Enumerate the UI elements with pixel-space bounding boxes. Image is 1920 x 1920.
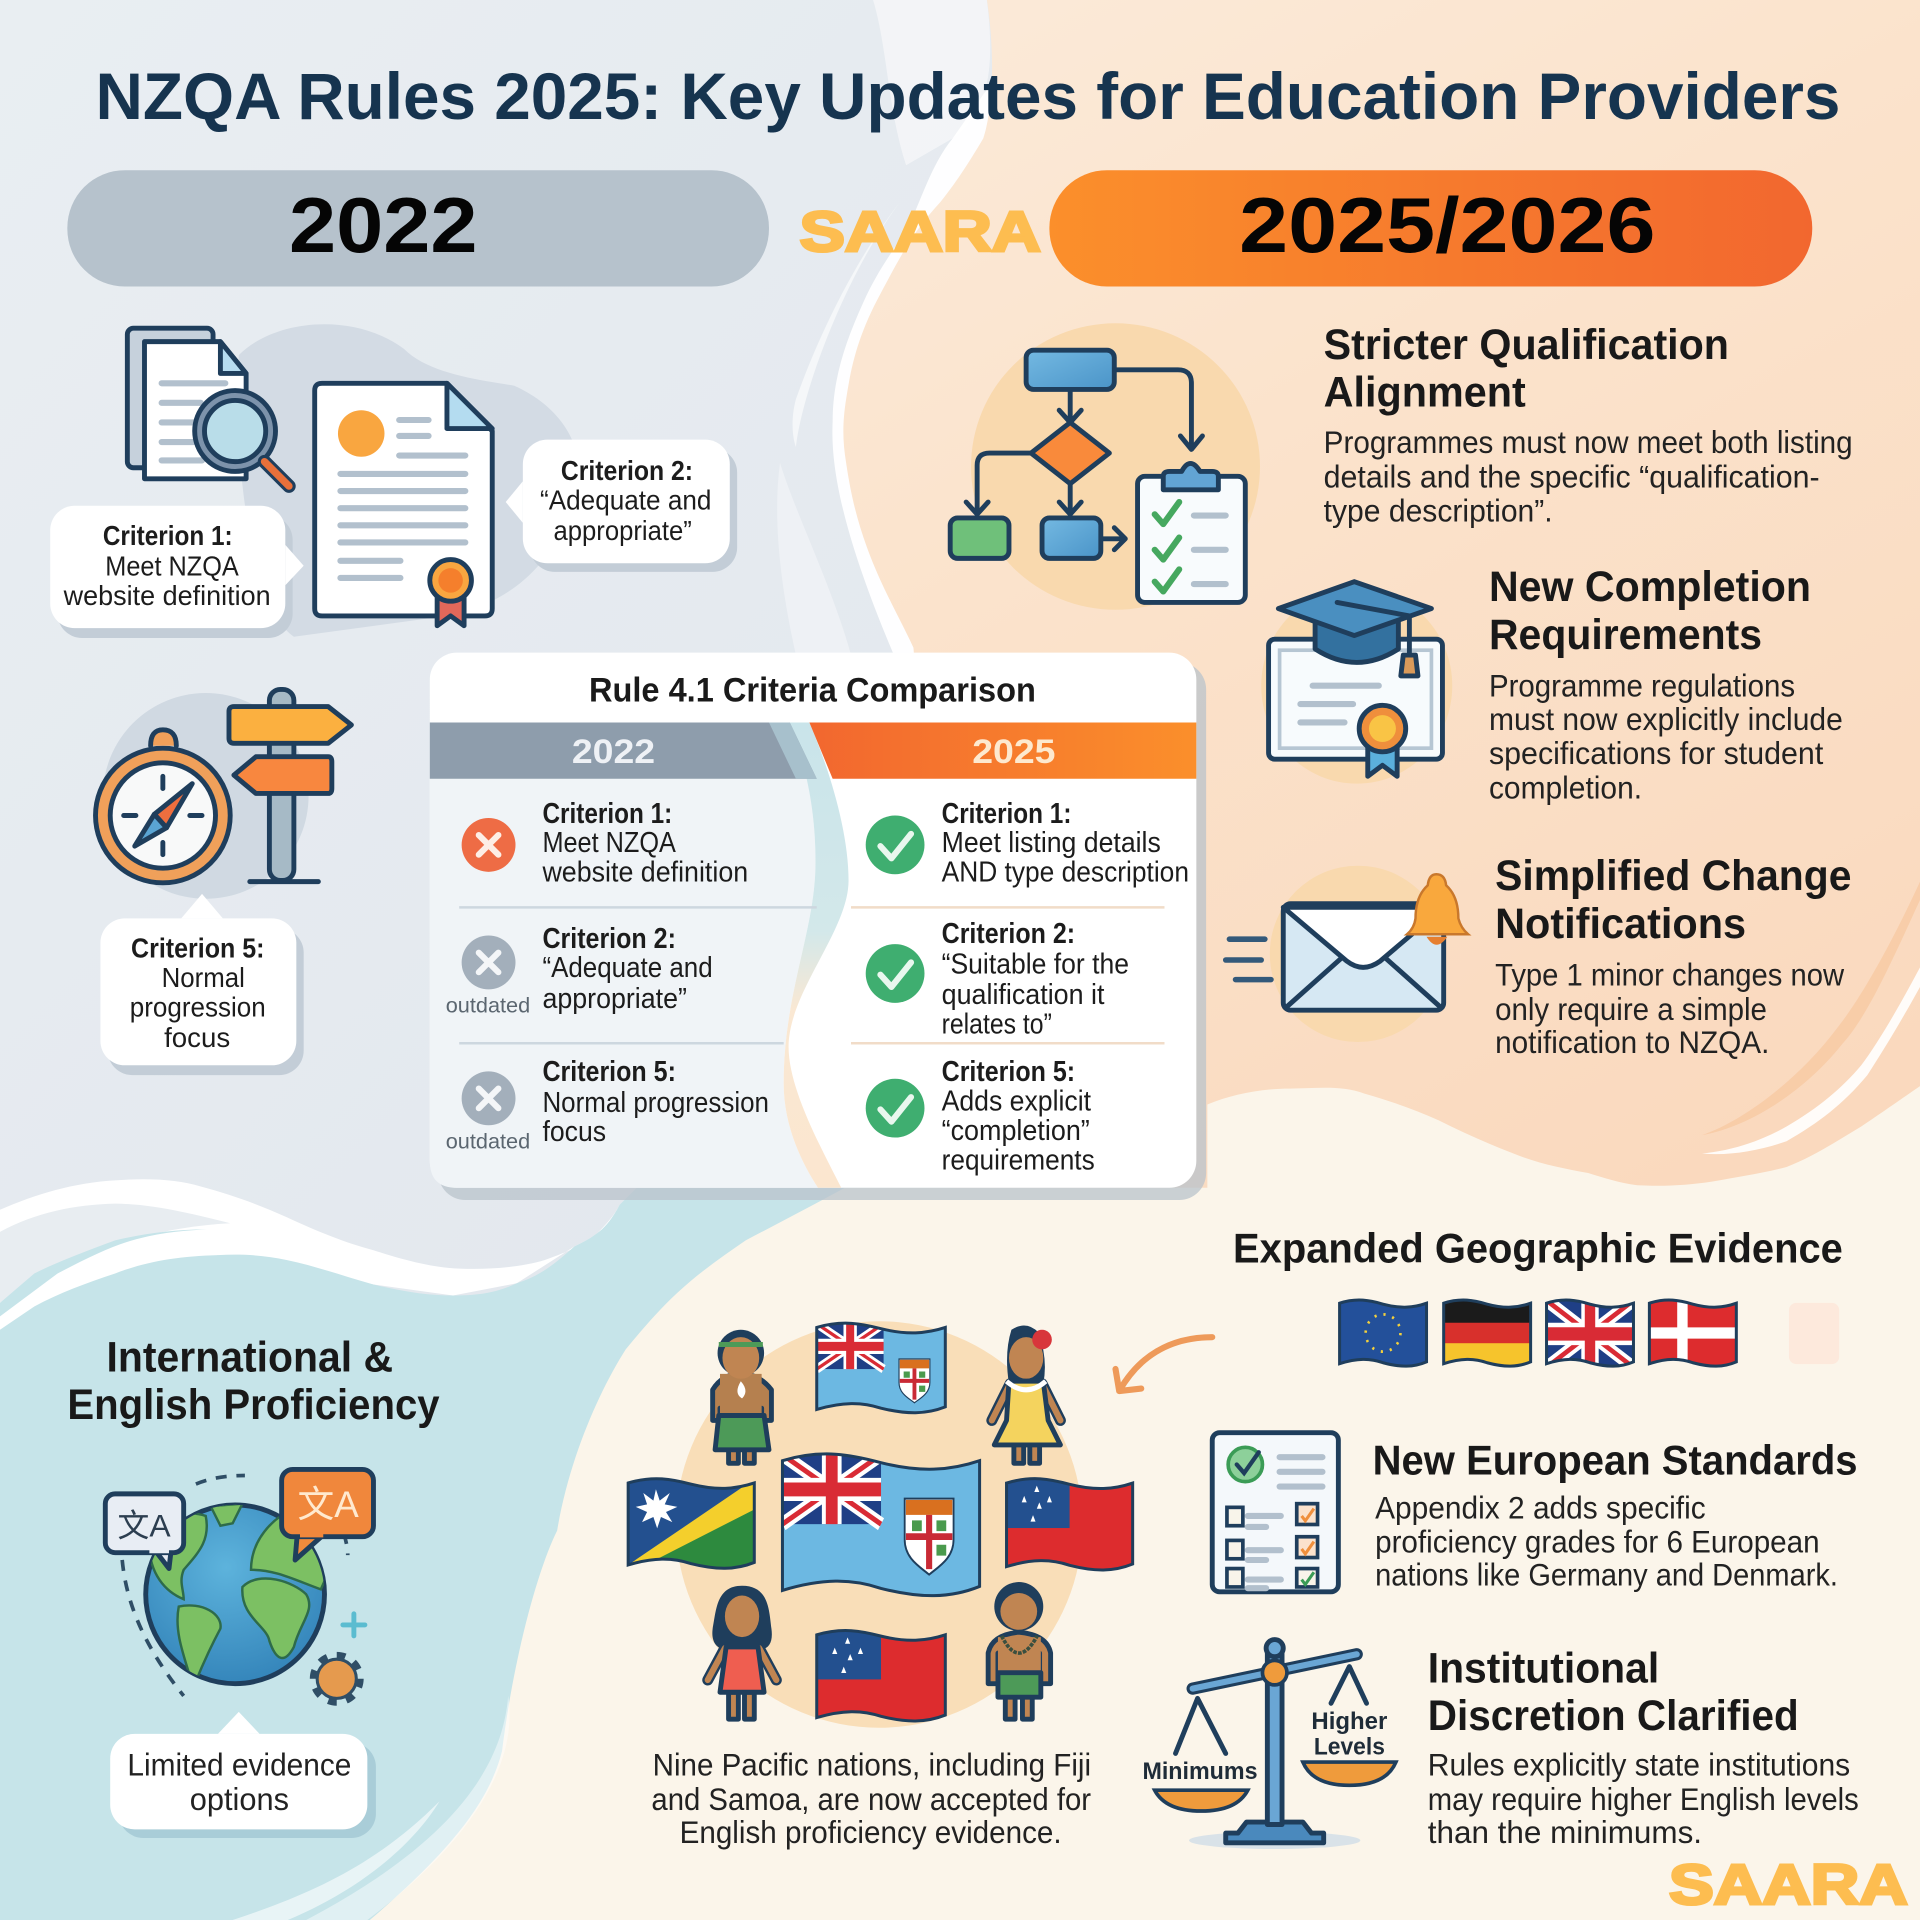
text: simplified change notifications: Simplified Change xyxy=(1495,852,1851,900)
text: Pacific nations xyxy=(651,1747,1091,1850)
callout: criterion 5 xyxy=(100,894,304,1075)
person: woman bottom left xyxy=(708,1586,776,1719)
icon: balance scale xyxy=(1142,1640,1396,1849)
flag: Samoa bottom xyxy=(817,1631,945,1723)
icon: documents and magnifier xyxy=(127,328,289,486)
text: simplified change notifications: Type 1 minor changes now xyxy=(1495,957,1845,993)
text: new European standards: nations like Germany and Denmark. xyxy=(1375,1557,1838,1593)
title: NZQA Rules 2025: Key Updates for Education Providers xyxy=(96,60,1840,134)
callout: criterion 1 xyxy=(50,506,304,638)
icon: balance scale: Minimums xyxy=(1142,1758,1258,1785)
panel: Rule 4.1 criteria comparison xyxy=(430,653,1206,1200)
text: new completion requirements: Programme regulations xyxy=(1489,668,1795,704)
icon: globe with translation bubbles: 文A xyxy=(118,1508,171,1544)
callout: criterion 2: appropriate” xyxy=(553,515,692,546)
callout: criterion 2: Criterion 2: xyxy=(561,455,693,486)
text: Pacific nations: English proficiency evidence. xyxy=(680,1814,1062,1850)
icon: globe with translation bubbles xyxy=(105,1469,373,1702)
row 1, 2025 xyxy=(866,798,1189,889)
column header: 2022: 2022 xyxy=(572,733,655,771)
text: stricter qualification alignment: Alignment xyxy=(1324,369,1526,417)
icon: balance scale: Levels xyxy=(1314,1734,1385,1761)
row 3, 2025: requirements xyxy=(942,1144,1095,1176)
year pill: 2025/2026 xyxy=(1049,170,1812,287)
flag: EU xyxy=(1340,1300,1427,1367)
text: Pacific nations: and Samoa, are now accepted for xyxy=(651,1781,1091,1817)
row 1, 2025: AND type description xyxy=(942,857,1189,889)
text: simplified change notifications: notification to NZQA. xyxy=(1495,1024,1769,1060)
year pill: 2022: 2022 xyxy=(289,181,478,269)
heading: international and English proficiency: International & xyxy=(107,1333,393,1381)
row 2, 2025: Criterion 2: xyxy=(942,918,1075,950)
faded flag xyxy=(1789,1303,1839,1364)
row 1, 2022 xyxy=(462,798,748,889)
text: institutional discretion clarified: than the minimums. xyxy=(1428,1814,1702,1850)
text: institutional discretion clarified: Discretion Clarified xyxy=(1428,1692,1799,1740)
text: stricter qualification alignment: details and the specific “qualification- xyxy=(1324,458,1820,494)
icon: globe with translation bubbles: 文A xyxy=(298,1484,359,1525)
text: institutional discretion clarified: may require higher English levels xyxy=(1428,1781,1859,1817)
flag: Samoa right xyxy=(1007,1479,1133,1572)
row 2, 2025: qualification it xyxy=(942,979,1104,1011)
callout: criterion 5: focus xyxy=(164,1022,230,1053)
row 2, 2022: “Adequate and xyxy=(542,952,713,984)
row 3, 2025: “completion” xyxy=(942,1115,1090,1147)
text: stricter qualification alignment xyxy=(1324,321,1853,529)
icon: certificate document xyxy=(315,383,492,626)
text: simplified change notifications: Notifications xyxy=(1495,900,1746,948)
text: stricter qualification alignment: type description”. xyxy=(1324,493,1553,529)
callout: criterion 2 xyxy=(506,440,737,572)
text: new European standards: Appendix 2 adds specific xyxy=(1375,1489,1706,1525)
heading: international and English proficiency xyxy=(67,1333,440,1429)
text: new completion requirements: Requirements xyxy=(1489,611,1762,659)
SAARA logo bottom: SAARA xyxy=(1669,1853,1908,1916)
row 3, 2022: Normal progression xyxy=(542,1087,769,1119)
arrow: Europe to Pacific xyxy=(1116,1337,1212,1391)
column header: 2025: 2025 xyxy=(972,733,1056,771)
column header: 2025 xyxy=(809,722,1196,779)
text: new European standards: proficiency grades for 6 European xyxy=(1375,1524,1820,1560)
person: man top left xyxy=(713,1330,771,1463)
row 2, 2025: “Suitable for the xyxy=(942,948,1129,980)
row 2, 2025: relates to” xyxy=(942,1008,1052,1040)
icon: flowchart and clipboard xyxy=(950,323,1260,610)
flag: United Kingdom xyxy=(1547,1300,1633,1367)
callout: criterion 5: Criterion 5: xyxy=(131,933,264,964)
illustration: Pacific nations flags and people xyxy=(628,1321,1133,1728)
flag: Fiji large xyxy=(782,1454,980,1598)
callout: criterion 5: Normal xyxy=(162,962,245,993)
text: stricter qualification alignment: Programmes must now meet both listing xyxy=(1324,424,1853,460)
text: institutional discretion clarified: Rules explicitly state institutions xyxy=(1428,1747,1850,1783)
text: simplified change notifications: only require a simple xyxy=(1495,991,1767,1027)
text: new completion requirements xyxy=(1489,563,1843,805)
row 1, 2022: website definition xyxy=(542,857,748,889)
heading: expanded geographic evidence: Expanded Geographic Evidence xyxy=(1233,1224,1843,1271)
icon: graduation cap and diploma xyxy=(1261,582,1452,784)
text: Pacific nations: Nine Pacific nations, including Fiji xyxy=(653,1747,1091,1783)
row 3, 2022: Criterion 5: xyxy=(542,1056,676,1088)
callout: criterion 5: progression xyxy=(130,991,266,1022)
illustration blob: documents xyxy=(238,324,579,637)
row 2, 2025 xyxy=(866,918,1129,1040)
callout: limited evidence options xyxy=(110,1712,376,1838)
flag: Denmark xyxy=(1649,1300,1736,1367)
heading: international and English proficiency: English Proficiency xyxy=(67,1381,440,1429)
callout: criterion 2: “Adequate and xyxy=(540,484,711,515)
icon: compass and signpost xyxy=(96,689,351,899)
icon: checklist xyxy=(1212,1433,1338,1592)
row 3, 2025: Adds explicit xyxy=(942,1086,1091,1118)
icon: balance scale: Higher xyxy=(1311,1708,1388,1735)
person: man bottom right xyxy=(988,1582,1051,1719)
callout: criterion 1: website definition xyxy=(63,580,271,611)
text: new completion requirements: completion. xyxy=(1489,769,1642,805)
flag: Fiji small xyxy=(817,1323,945,1414)
column header: 2022 xyxy=(430,722,817,779)
callout: criterion 1: Meet NZQA xyxy=(105,551,239,582)
row 2, 2022: appropriate” xyxy=(542,983,687,1015)
year pill: 2025/2026: 2025/2026 xyxy=(1239,181,1656,269)
flag: Solomon Islands xyxy=(628,1479,754,1570)
European flags row xyxy=(1340,1300,1839,1367)
row 3, 2025 xyxy=(866,1056,1095,1176)
row 3, 2022: outdated xyxy=(446,1131,530,1154)
SAARA logo: SAARA xyxy=(800,200,1041,263)
row 1, 2025: Criterion 1: xyxy=(942,798,1071,830)
row 1, 2022: Criterion 1: xyxy=(542,798,672,830)
text: new completion requirements: New Completion xyxy=(1489,563,1811,611)
callout: criterion 1: Criterion 1: xyxy=(103,520,233,551)
text: institutional discretion clarified xyxy=(1428,1644,1859,1850)
panel heading: Rule 4.1 Criteria Comparison xyxy=(589,672,1036,710)
row 1, 2025: Meet listing details xyxy=(942,827,1161,859)
callout: limited evidence options: Limited evidence xyxy=(127,1747,351,1783)
text: new completion requirements: must now explicitly include xyxy=(1489,701,1843,737)
row 1, 2022: Meet NZQA xyxy=(542,827,677,859)
text: new European standards: New European Standards xyxy=(1373,1436,1858,1483)
text: new completion requirements: specifications for student xyxy=(1489,735,1823,771)
row 2, 2022: outdated xyxy=(446,995,530,1018)
text: institutional discretion clarified: Institutional xyxy=(1428,1644,1659,1692)
text: simplified change notifications xyxy=(1495,852,1851,1060)
row 3, 2025: Criterion 5: xyxy=(942,1056,1075,1088)
person: woman top right xyxy=(992,1325,1060,1463)
row 2, 2022: Criterion 2: xyxy=(542,923,676,955)
callout: limited evidence options: options xyxy=(190,1781,289,1817)
icon: envelope and bell xyxy=(1226,866,1468,1042)
year pill: 2022 xyxy=(67,170,769,287)
row 2, 2022 xyxy=(446,923,713,1018)
row 3, 2022: focus xyxy=(542,1116,606,1148)
row 3, 2022 xyxy=(446,1056,769,1154)
text: new European standards xyxy=(1373,1436,1858,1593)
text: stricter qualification alignment: Stricter Qualification xyxy=(1324,321,1729,369)
flag: Germany xyxy=(1444,1300,1531,1367)
